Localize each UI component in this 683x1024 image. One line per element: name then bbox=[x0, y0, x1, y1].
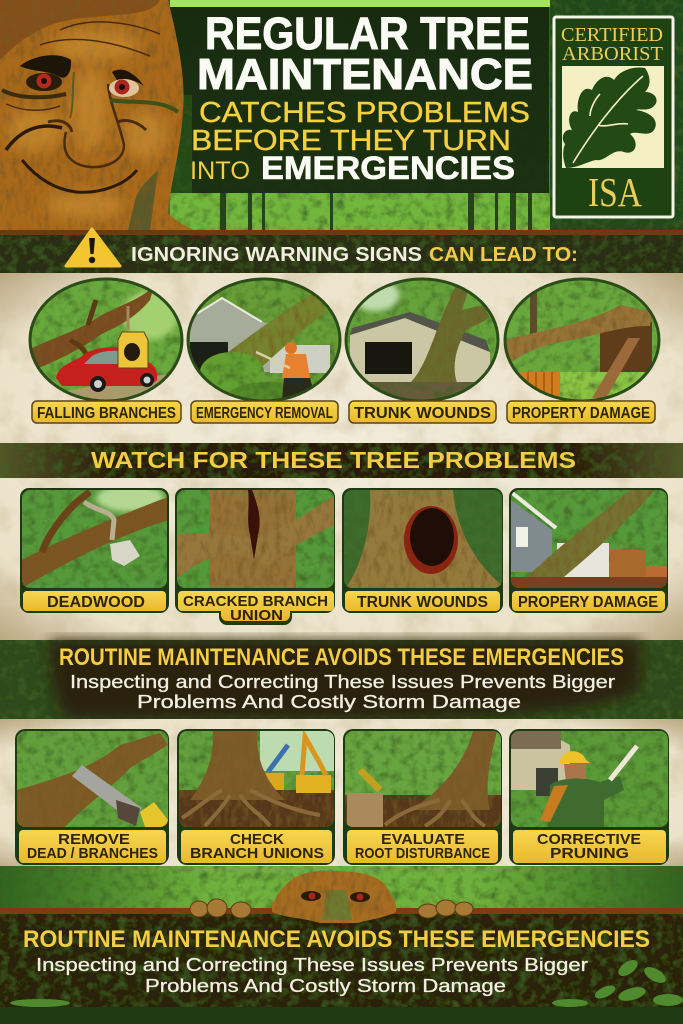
smile bbox=[22, 160, 137, 192]
label bbox=[178, 591, 334, 624]
label: FALLING BRANCHES bbox=[37, 405, 176, 422]
panel: remove dead branches bbox=[15, 729, 169, 865]
illustration: excavator bbox=[258, 737, 331, 793]
panel: property damage circle bbox=[505, 279, 660, 423]
label bbox=[347, 830, 498, 863]
parchment background: lower bbox=[0, 719, 683, 869]
label bbox=[191, 401, 338, 423]
label: EVALUATE bbox=[381, 831, 465, 848]
header: forest scene bbox=[0, 0, 683, 231]
label: PROPERTY DAMAGE bbox=[512, 405, 650, 422]
banner heading bbox=[131, 244, 578, 266]
header title panel bbox=[168, 7, 549, 193]
icon: warning triangle bbox=[66, 229, 120, 266]
illustration: trunk and roots bbox=[385, 731, 497, 826]
illustration: arborist bbox=[540, 746, 637, 827]
description bbox=[36, 955, 588, 996]
panel: cracked branch union bbox=[175, 488, 335, 625]
badge: ISA Certified Arborist: ISA bbox=[588, 169, 642, 215]
illustration: worker bbox=[256, 342, 316, 400]
banner: watch for these tree problems: WATCH FOR THESE TREE PROBLEMS bbox=[91, 447, 576, 473]
panel: falling branches bbox=[28, 279, 182, 423]
label: PRUNING bbox=[550, 845, 629, 862]
illustration: peeking tree face bbox=[190, 871, 473, 923]
title text bbox=[190, 8, 533, 186]
banner heading: IGNORING WARNING SIGNS bbox=[131, 244, 422, 266]
label: PROPERY DAMAGE bbox=[518, 594, 658, 611]
panel: trunk wounds circle bbox=[345, 279, 499, 423]
label bbox=[507, 401, 655, 423]
banner: routine maintenance, upper bbox=[0, 640, 683, 719]
panel: emergency removal bbox=[187, 279, 341, 423]
panel: evaluate root disturbance bbox=[343, 729, 502, 865]
foliage strip bbox=[0, 866, 683, 909]
title text: INTO bbox=[190, 157, 250, 185]
badge: ISA Certified Arborist: ARBORIST bbox=[562, 43, 663, 65]
illustration: trunk hollow bbox=[404, 506, 458, 574]
illustration: playset bbox=[592, 322, 652, 398]
label: UNION bbox=[230, 607, 283, 624]
panel: check branch unions bbox=[177, 729, 335, 865]
icon: oak leaf bbox=[563, 68, 657, 168]
label: TRUNK WOUNDS bbox=[357, 594, 488, 611]
title text: BEFORE THEY TURN bbox=[191, 125, 511, 157]
banner: watch for these tree problems bbox=[0, 443, 683, 478]
badge: ISA Certified Arborist: CERTIFIED bbox=[561, 24, 663, 46]
icon: left hand bbox=[190, 899, 251, 918]
foliage: bottom corners bbox=[10, 957, 683, 1007]
title text: CATCHES PROBLEMS bbox=[199, 97, 530, 129]
badge: ISA Certified Arborist bbox=[554, 17, 673, 217]
label bbox=[32, 401, 181, 423]
label: TRUNK WOUNDS bbox=[354, 405, 491, 422]
heading: ROUTINE MAINTENANCE AVOIDS THESE EMERGENCIES bbox=[23, 926, 650, 953]
description: Problems And Costly Storm Damage bbox=[145, 976, 506, 996]
label: BRANCH UNIONS bbox=[190, 845, 324, 862]
parchment background: upper bbox=[0, 273, 683, 640]
nose bbox=[48, 72, 146, 167]
label bbox=[181, 830, 332, 863]
label: DEAD / BRANCHES bbox=[27, 845, 158, 862]
panel: trunk wounds square bbox=[342, 488, 503, 613]
label: EMERGENCY REMOVAL bbox=[196, 405, 333, 422]
icon: right hand bbox=[418, 900, 473, 918]
label: ROOT DISTURBANCE bbox=[355, 845, 490, 862]
banner heading: CAN LEAD TO: bbox=[429, 244, 578, 266]
banner: ignoring warning signs bbox=[0, 229, 683, 273]
illustration: red car bbox=[56, 347, 157, 392]
label: REMOVE bbox=[58, 831, 130, 848]
label bbox=[23, 591, 166, 611]
icon: metal tag bbox=[84, 502, 140, 566]
illustration: pruning saw bbox=[72, 765, 168, 827]
panel: corrective pruning bbox=[509, 729, 669, 865]
description: Inspecting and Correcting These Issues Prevents Bigger bbox=[70, 672, 615, 692]
brows and eyes bbox=[2, 22, 178, 112]
label: CORRECTIVE bbox=[537, 831, 641, 848]
label bbox=[19, 830, 166, 863]
description: Inspecting and Correcting These Issues Prevents Bigger bbox=[36, 955, 588, 975]
illustration: tree roots bbox=[182, 731, 320, 826]
illustration: smiling tree face bbox=[0, 0, 196, 231]
title text: EMERGENCIES bbox=[261, 150, 515, 186]
panel: deadwood bbox=[20, 484, 169, 613]
description: Problems And Costly Storm Damage bbox=[137, 692, 521, 712]
label bbox=[513, 830, 666, 863]
panel: propery damage square bbox=[509, 488, 668, 613]
bottom section: routine maintenance bbox=[0, 908, 683, 1007]
icon: hanging tag bbox=[118, 306, 148, 368]
description bbox=[70, 672, 615, 712]
label: DEADWOOD bbox=[47, 594, 145, 611]
title text: MAINTENANCE bbox=[197, 50, 533, 99]
label: CHECK bbox=[230, 831, 284, 848]
label: CRACKED BRANCH bbox=[183, 593, 328, 610]
title text: REGULAR TREE bbox=[205, 8, 530, 59]
